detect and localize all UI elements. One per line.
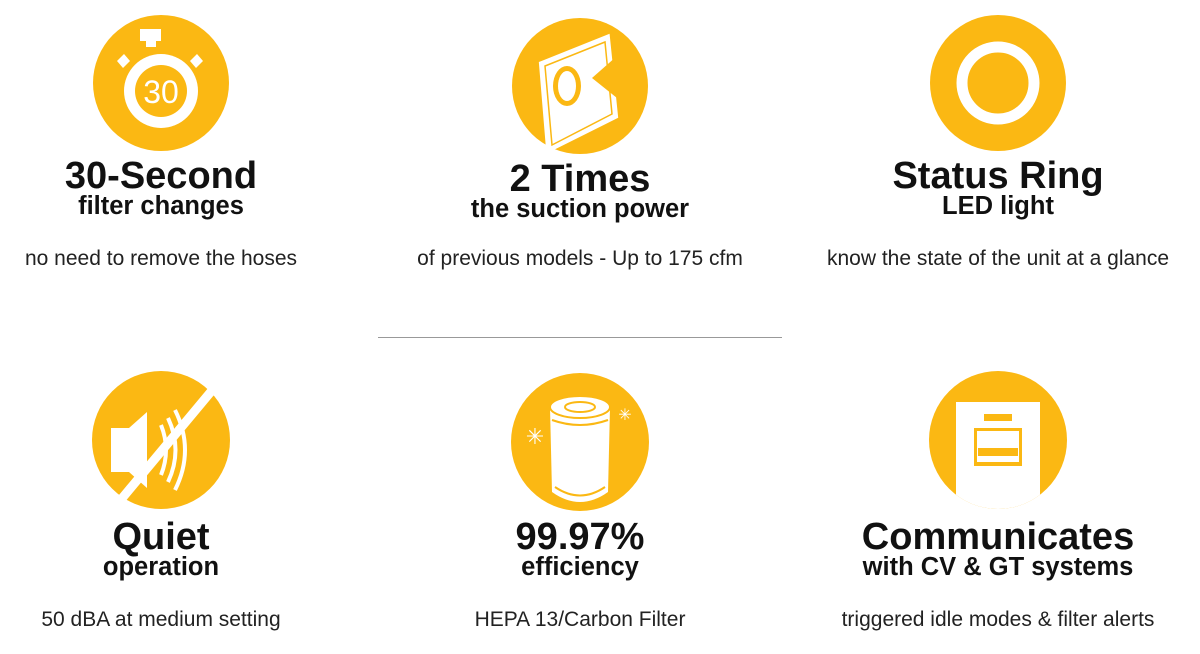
description: HEPA 13/Carbon Filter <box>475 608 685 631</box>
subheading: LED light <box>942 192 1054 220</box>
icon: stopwatch <box>93 15 229 151</box>
description: know the state of the unit at a glance <box>827 247 1169 270</box>
icon: status ring <box>930 15 1066 151</box>
block: communicates <box>842 516 1154 631</box>
icon: muted speaker <box>92 371 230 509</box>
icon: HEPA filter <box>511 373 649 511</box>
description: triggered idle modes & filter alerts <box>842 608 1154 631</box>
subheading: operation <box>103 553 219 581</box>
icon: stopwatch: 30 <box>143 74 179 110</box>
description: of previous models - Up to 175 cfm <box>417 247 743 270</box>
heading: Communicates <box>862 516 1134 558</box>
heading: 30-Second <box>65 155 257 197</box>
block: efficiency <box>475 516 686 631</box>
subheading: efficiency <box>521 553 639 581</box>
description: 50 dBA at medium setting <box>41 608 281 631</box>
icon: control panel <box>929 371 1067 509</box>
heading: Quiet <box>112 516 210 558</box>
block: 30-second <box>25 155 297 270</box>
icon: HEPA filter: ✳ <box>526 424 544 449</box>
description: no need to remove the hoses <box>25 247 297 270</box>
subheading: with CV & GT systems <box>863 553 1133 581</box>
icon: HEPA filter: ✳ <box>618 407 632 424</box>
subheading: filter changes <box>78 192 244 220</box>
block: quiet <box>41 516 281 631</box>
block: suction <box>417 158 743 270</box>
icon: suction nozzle <box>512 18 648 154</box>
block: status ring <box>827 155 1169 270</box>
divider <box>378 337 782 338</box>
heading: 99.97% <box>516 516 644 558</box>
subheading: the suction power <box>471 195 689 223</box>
heading: Status Ring <box>892 155 1104 197</box>
heading: 2 Times <box>510 158 650 200</box>
